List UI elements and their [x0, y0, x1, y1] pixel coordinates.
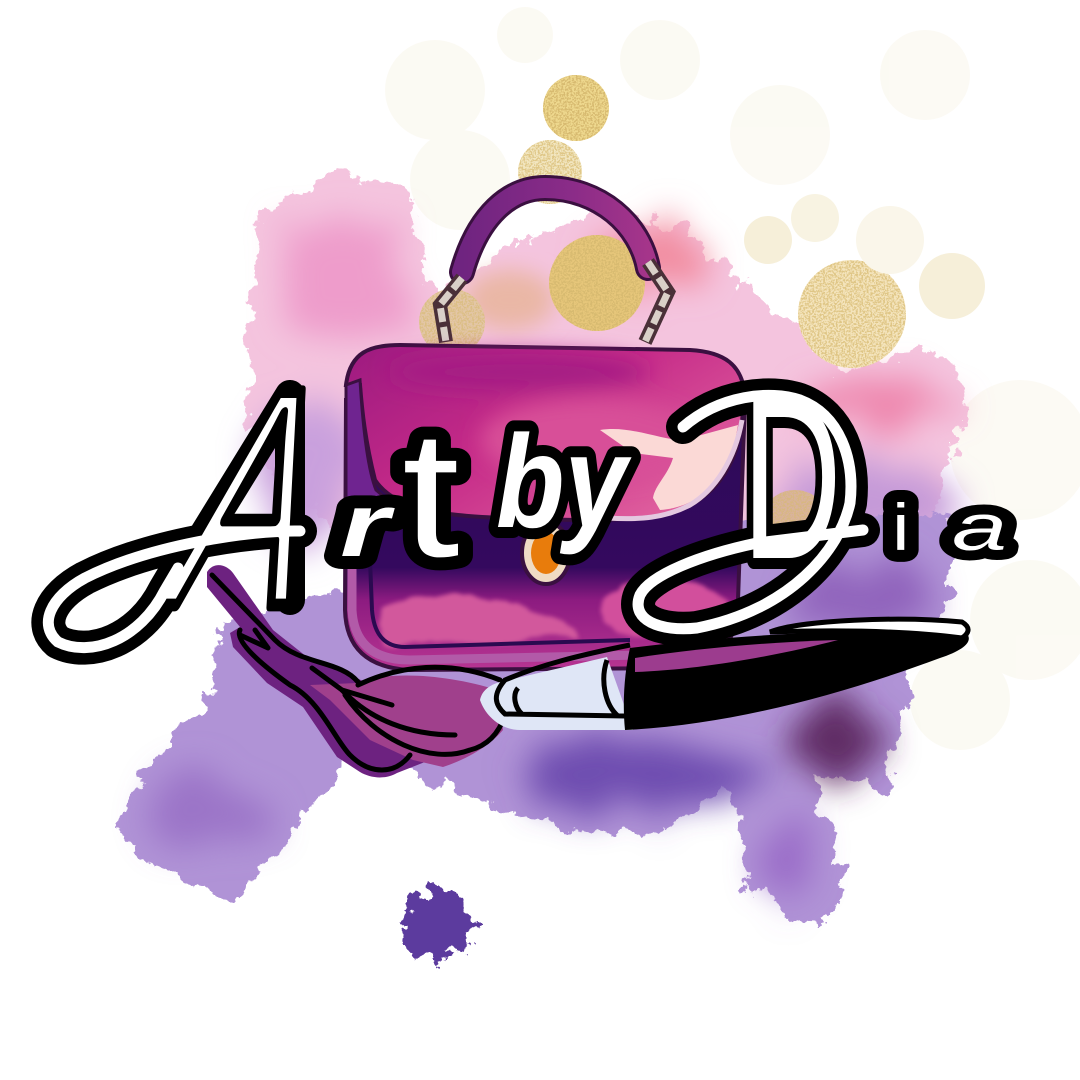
paintbrush — [207, 565, 969, 777]
letter A: A — [136, 326, 378, 672]
bag flap — [346, 345, 745, 520]
brush ferrule outline — [496, 645, 630, 716]
brush bristles dark — [207, 565, 430, 777]
flap watercolor shading — [390, 354, 700, 482]
flap lower rim — [607, 420, 742, 519]
brush handle — [624, 631, 969, 730]
bag lower highlights — [378, 580, 730, 645]
title: Art by Dia — [48, 326, 1007, 672]
watercolor: small purple blot — [404, 889, 476, 961]
flourish strokes — [48, 395, 863, 648]
handle chains — [440, 262, 668, 342]
bag left side panel — [346, 380, 400, 515]
brush handle magenta stripe — [635, 640, 838, 672]
brush handle white edge — [770, 619, 968, 638]
letter a: a — [952, 490, 1007, 564]
brush ferrule — [480, 657, 633, 730]
letter r: r — [340, 475, 395, 576]
brush bristle lines — [212, 575, 505, 770]
letter i: i — [892, 491, 910, 564]
gold glitter circles — [419, 75, 985, 560]
faint cream circles — [385, 7, 1080, 750]
bag body — [345, 400, 745, 670]
watercolor: purple wash — [115, 510, 950, 930]
bag rim and inner seam — [352, 500, 640, 660]
watercolor: pink wash — [248, 172, 965, 545]
by: by — [496, 407, 632, 555]
letter D: D — [742, 351, 842, 608]
flourish outlines — [48, 395, 863, 648]
letter t: t — [402, 394, 460, 595]
brush bristles pink — [310, 676, 503, 767]
bag clasp — [522, 522, 570, 584]
bag handle — [462, 188, 648, 272]
flap highlight — [600, 425, 738, 510]
gold speckle in pink wash — [465, 270, 555, 330]
handbag — [345, 188, 745, 670]
